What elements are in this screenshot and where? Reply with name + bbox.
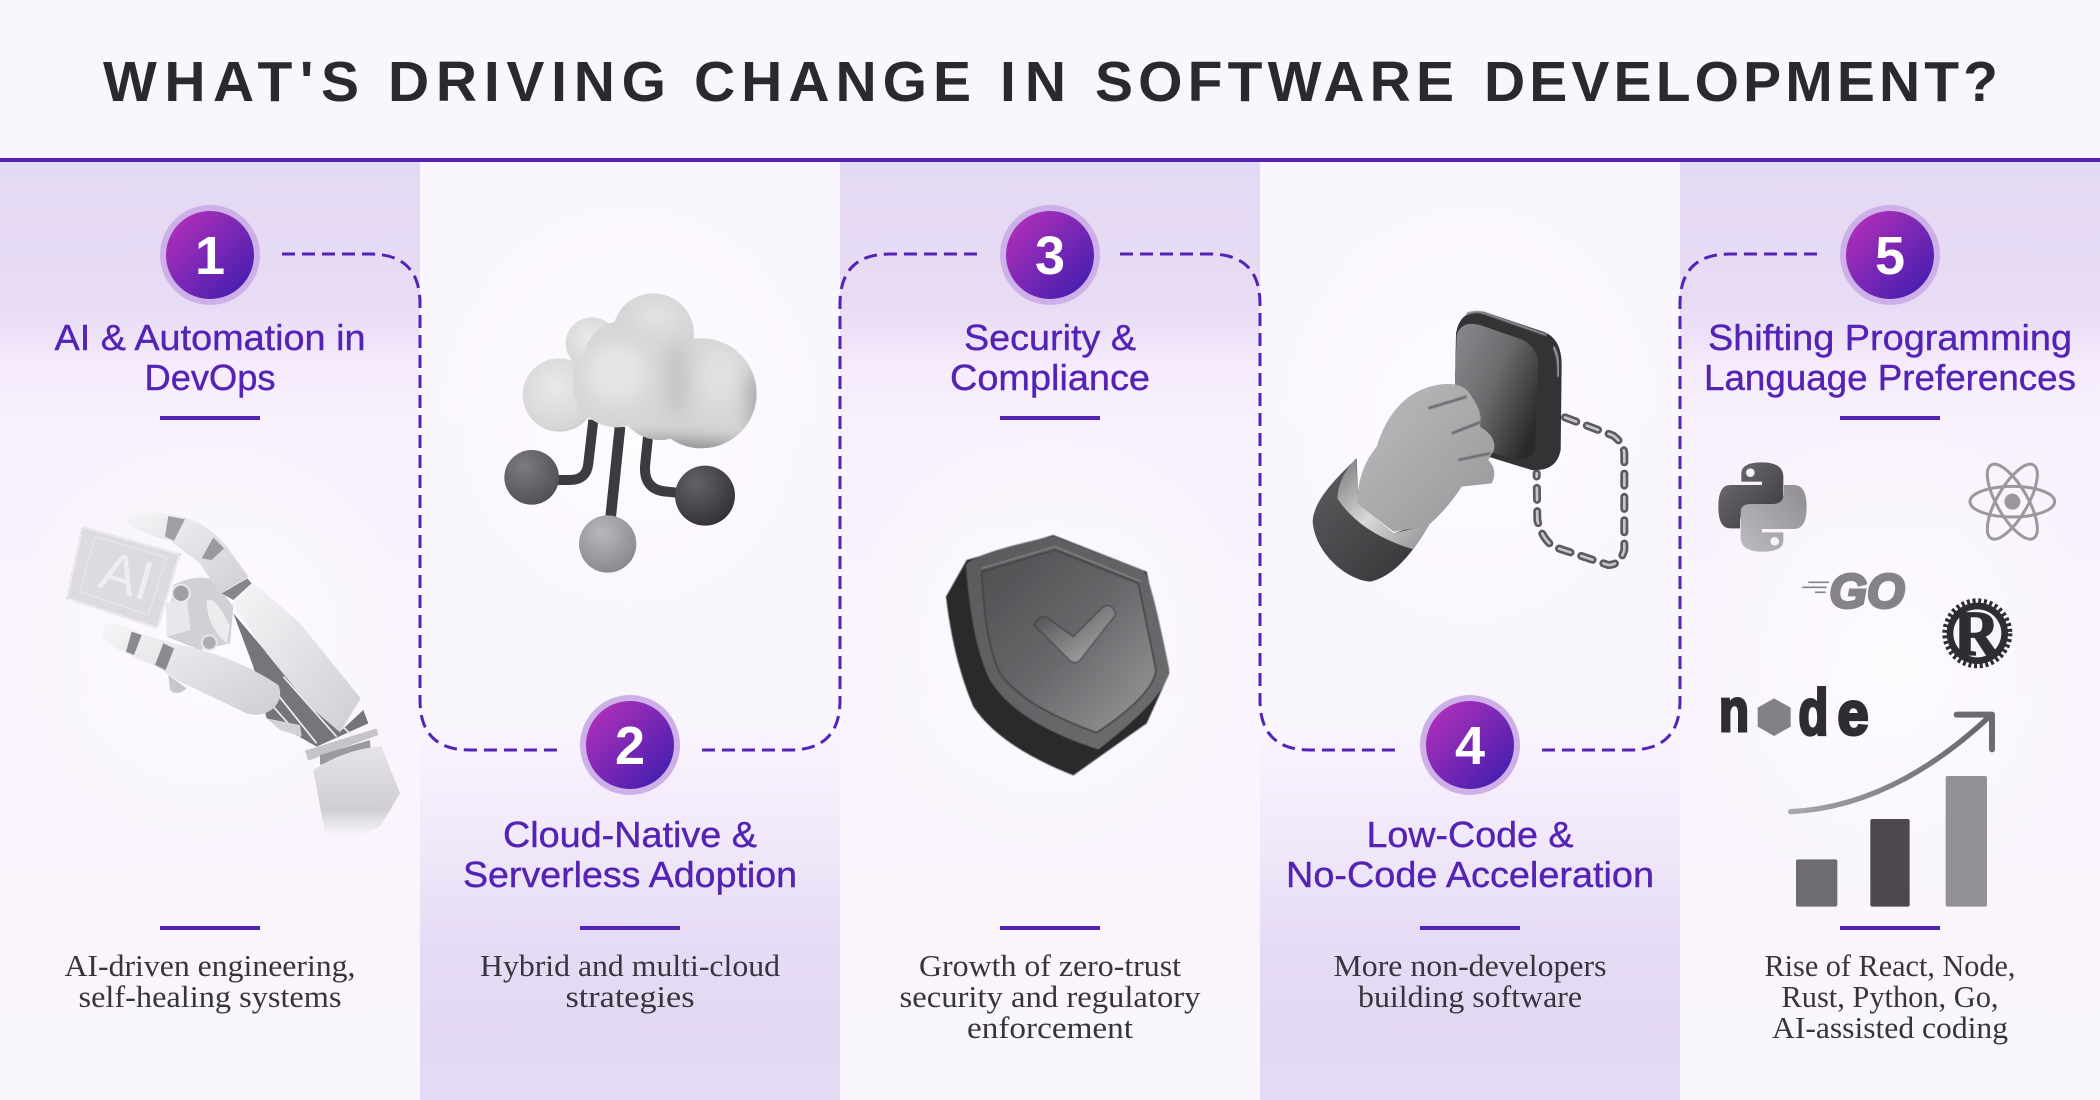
language logos and growth chart xyxy=(1718,457,2055,907)
step 4 xyxy=(1286,311,1654,1014)
divider top 5 xyxy=(1840,416,1940,420)
description 1 xyxy=(64,948,356,1014)
icon: cloud with nodes xyxy=(504,290,770,573)
icon: Node logo xyxy=(1719,675,1869,748)
icon: robot hand holding AI chip: AI xyxy=(93,539,160,613)
number badge 4: 4 xyxy=(1455,716,1485,776)
number badge 3 xyxy=(1000,205,1100,305)
title: DRIVING xyxy=(388,50,666,114)
divider bottom 3 xyxy=(1000,926,1100,930)
heading 4 xyxy=(1286,814,1654,895)
description 5 xyxy=(1764,948,2016,1045)
title: DEVELOPMENT? xyxy=(1484,50,1998,114)
panel 1 background xyxy=(0,160,420,1100)
divider 4 xyxy=(1420,926,1520,930)
heading 2: Cloud-Native & xyxy=(503,814,757,855)
heading 3: Security & xyxy=(964,317,1136,358)
icon: Node logo: e xyxy=(1837,679,1869,748)
heading 1: DevOps xyxy=(144,357,276,398)
header rule xyxy=(0,158,2100,162)
number badge 5: 5 xyxy=(1875,226,1905,286)
description 5: Rise of React, Node, xyxy=(1764,948,2016,983)
step 2 xyxy=(463,290,797,1014)
icon: robot hand holding AI chip xyxy=(68,513,400,836)
heading 5: Language Preferences xyxy=(1704,357,2076,398)
description 4: More non-developers xyxy=(1334,948,1606,983)
panel 4 background xyxy=(1260,160,1680,1100)
divider 2 xyxy=(580,926,680,930)
number badge 5 xyxy=(1840,205,1940,305)
description 5: Rust, Python, Go, xyxy=(1782,979,1998,1014)
dashed connector through the five steps xyxy=(282,254,1820,750)
number badge 1 xyxy=(160,205,260,305)
icon: Node logo: d xyxy=(1798,675,1828,748)
title xyxy=(103,50,1998,114)
number badge 3: 3 xyxy=(1035,226,1065,286)
description 1: AI-driven engineering, xyxy=(64,948,356,983)
icon: Rust logo: R xyxy=(1954,599,2001,669)
chart: growth bars with rising arrow xyxy=(1791,715,1992,907)
icon: shield with check mark xyxy=(946,535,1169,775)
icon: Node logo: n xyxy=(1719,677,1749,744)
panel 2 background xyxy=(420,160,840,1100)
title: SOFTWARE xyxy=(1095,50,1454,114)
step 1 xyxy=(54,205,400,1014)
heading 2: Serverless Adoption xyxy=(463,854,797,895)
heading 4: Low-Code & xyxy=(1366,814,1574,855)
description 5: AI-assisted coding xyxy=(1772,1010,2008,1045)
icon: Go logo: GO xyxy=(1829,564,1905,618)
description 2: strategies xyxy=(566,979,694,1014)
description 3: security and regulatory xyxy=(900,979,1201,1014)
description 3: Growth of zero-trust xyxy=(919,948,1181,983)
heading 3 xyxy=(950,317,1150,398)
step 3 xyxy=(900,205,1201,1045)
description 3 xyxy=(900,948,1201,1045)
heading 5 xyxy=(1704,317,2076,398)
number badge 4 xyxy=(1420,695,1520,795)
title: IN xyxy=(1000,50,1066,114)
description 3: enforcement xyxy=(967,1010,1133,1045)
panel 3 background xyxy=(840,160,1260,1100)
heading 1 xyxy=(54,317,366,398)
description 1: self-healing systems xyxy=(78,979,342,1014)
heading 4: No-Code Acceleration xyxy=(1286,854,1654,895)
heading 3: Compliance xyxy=(950,357,1150,398)
heading 2 xyxy=(463,814,797,895)
title: CHANGE xyxy=(694,50,971,114)
divider bottom 5 xyxy=(1840,926,1940,930)
icon: Python logo xyxy=(1718,462,1807,552)
icon: React logo xyxy=(1970,457,2055,546)
number badge 2 xyxy=(580,695,680,795)
divider top 1 xyxy=(160,416,260,420)
description 2 xyxy=(480,948,781,1014)
heading 5: Shifting Programming xyxy=(1708,317,2072,358)
divider top 3 xyxy=(1000,416,1100,420)
heading 1: AI & Automation in xyxy=(54,317,366,358)
description 2: Hybrid and multi-cloud xyxy=(480,948,781,983)
title: WHAT'S xyxy=(103,50,359,114)
icon: hand pressing security key with chain xyxy=(1313,311,1624,582)
number badge 2: 2 xyxy=(615,716,645,776)
description 4: building software xyxy=(1358,979,1582,1014)
panel 5 background xyxy=(1680,160,2100,1100)
divider bottom 1 xyxy=(160,926,260,930)
step 5 xyxy=(1704,205,2076,1045)
description 4 xyxy=(1334,948,1606,1014)
number badge 1: 1 xyxy=(195,226,225,286)
